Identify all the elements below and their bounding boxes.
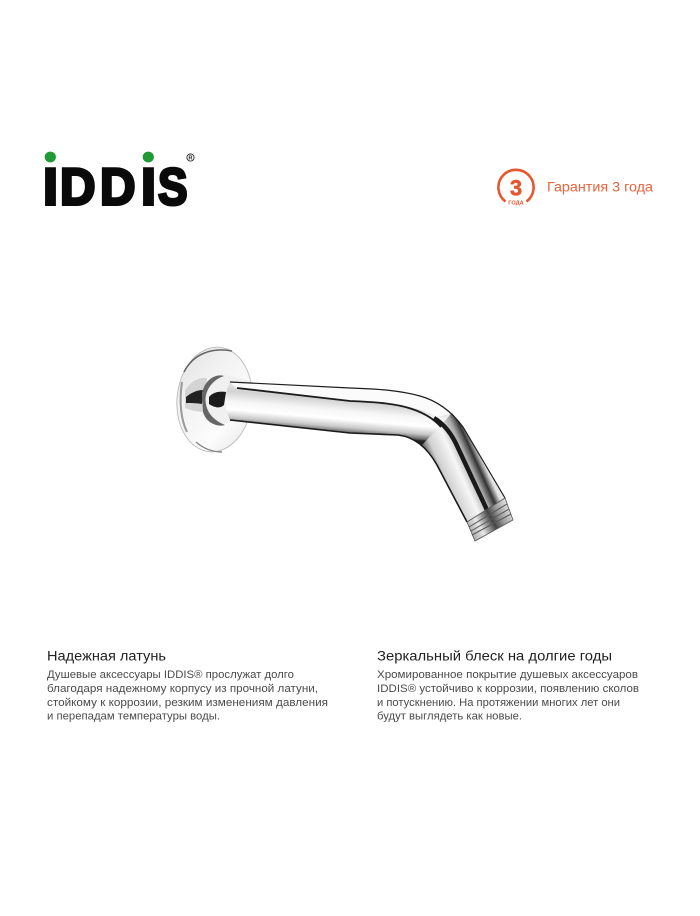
bright upper band [230,382,450,417]
registered mark: R [189,156,193,162]
angled section [422,413,505,522]
registered mark [187,154,194,162]
threaded end [467,498,513,541]
heading: Зеркальный блеск на долгие годы [377,648,612,664]
warranty badge [498,170,654,206]
product photo: chrome shower arm [172,343,513,541]
body [377,669,639,722]
logo wordmark: I [43,158,58,216]
logo wordmark [43,158,188,216]
wall flange [172,343,257,456]
body: будут выглядеть как новые. [377,710,522,722]
body: и перепадам температуры воды. [47,710,220,722]
body: благодаря надежному корпусу из прочной латуни, [47,683,318,695]
chrome reflections [230,382,505,522]
icon: 3 year warranty: 3 [510,176,522,200]
logo wordmark: I [141,158,156,216]
logo: IDDIS [43,152,194,216]
body: IDDIS® устойчиво к коррозии, появлению сколов [377,683,639,695]
text block: brass [47,648,328,722]
logo green dots [45,152,154,162]
body: Хромированное покрытие душевых аксессуаров [377,669,638,681]
body: стойкому к коррозии, резким изменениям давления [47,697,328,709]
logo wordmark: D [100,158,136,216]
heading: Надежная латунь [47,648,166,664]
logo wordmark: S [158,158,188,216]
warranty label: Гарантия 3 года [547,180,654,194]
body: Душевые аксессуары IDDIS® прослужат долго [47,669,294,681]
body: и потускнению. На протяжении многих лет они [377,697,620,709]
icon: 3 year warranty: ГОДА [508,200,524,206]
collar [202,375,250,426]
body [47,669,328,722]
pipe body and bend [226,382,505,522]
text block: mirror shine [377,648,639,722]
logo wordmark: D [60,158,96,216]
icon: 3 year warranty [498,170,534,206]
